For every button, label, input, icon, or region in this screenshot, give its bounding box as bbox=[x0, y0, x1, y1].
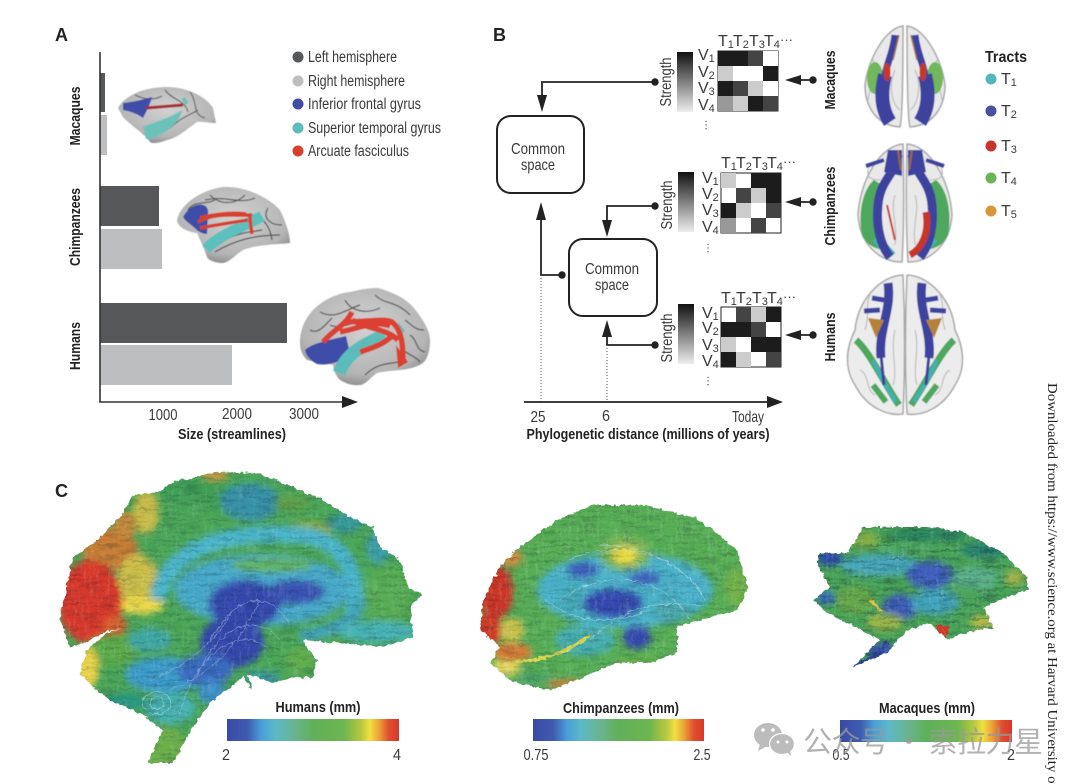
bar chart: streamlines by species: 1000 bbox=[148, 407, 178, 424]
matrix: humans: 4 bbox=[777, 296, 783, 308]
matrix: chimpanzees: Strength bbox=[659, 180, 676, 230]
matrix: macaques: 3 bbox=[709, 86, 715, 98]
matrix: humans: ··· bbox=[702, 376, 714, 386]
matrix: macaques: 2 bbox=[743, 39, 749, 51]
matrix: chimpanzees: V bbox=[702, 170, 713, 187]
bar chart: streamlines by species: Macaques bbox=[67, 86, 84, 146]
colorbar: macaques bbox=[832, 700, 1015, 764]
matrix: macaques: 4 bbox=[774, 39, 780, 51]
matrix: humans bbox=[659, 289, 796, 386]
colorbar: humans: Humans (mm) bbox=[276, 699, 361, 716]
tracts legend: T bbox=[1001, 103, 1011, 120]
matrix: macaques: V bbox=[698, 97, 709, 114]
tracts legend: 5 bbox=[1011, 209, 1017, 221]
matrix: humans: V bbox=[702, 337, 713, 354]
matrix: humans: T bbox=[736, 290, 746, 307]
colorbar: chimpanzees: 0.75 bbox=[524, 747, 549, 764]
matrix: chimpanzees: V bbox=[702, 219, 713, 236]
species labels beside top-view brains: Humans bbox=[822, 312, 839, 362]
bar chart: streamlines by species: 3000 bbox=[289, 406, 319, 423]
panel B: phylogenetic model bbox=[493, 25, 1027, 443]
matrix: chimpanzees: T bbox=[752, 155, 762, 172]
tracts legend: T bbox=[1001, 170, 1011, 187]
arrows from brains to matrices bbox=[785, 75, 817, 340]
matrix: chimpanzees bbox=[659, 154, 796, 254]
tracts legend: Tracts bbox=[985, 49, 1027, 66]
tracts legend: T bbox=[1001, 203, 1011, 220]
species labels beside top-view brains: Macaques bbox=[822, 50, 839, 110]
matrix: chimpanzees: 1 bbox=[731, 161, 737, 173]
panel B letter: B bbox=[493, 25, 506, 45]
matrix: humans: T bbox=[752, 290, 762, 307]
colorbar: humans: 4 bbox=[393, 747, 401, 764]
colorbar: humans: 2 bbox=[222, 747, 230, 764]
tracts legend: 3 bbox=[1011, 144, 1017, 156]
colorbar: chimpanzees bbox=[524, 700, 711, 764]
matrix: humans: 2 bbox=[746, 296, 752, 308]
legend: hemispheres and regions: Left hemisphere bbox=[308, 49, 397, 66]
matrix: macaques: T bbox=[749, 33, 759, 50]
legend: hemispheres and regions: Arcuate fasciculus bbox=[308, 143, 409, 160]
brain map: chimpanzees bbox=[480, 504, 748, 690]
watermark text: 公众号 · 索拉力星 bbox=[803, 719, 1043, 761]
bar chart: streamlines by species: Humans bbox=[67, 322, 84, 370]
matrix: chimpanzees: ··· bbox=[702, 242, 714, 254]
matrix: chimpanzees: V bbox=[702, 186, 713, 203]
matrix: macaques: 3 bbox=[759, 39, 765, 51]
matrix: humans: V bbox=[702, 305, 713, 322]
panel A: tract size bars bbox=[55, 25, 441, 443]
matrix: macaques: 2 bbox=[709, 70, 715, 82]
icon: WeChat bubbles bbox=[754, 723, 794, 756]
matrix: humans: 1 bbox=[731, 296, 737, 308]
timeline axis: Phylogenetic distance (millions of years) bbox=[526, 426, 770, 443]
species labels beside top-view brains: Chimpanzees bbox=[822, 166, 839, 246]
legend: hemispheres and regions: Superior temporal gyrus bbox=[308, 120, 441, 137]
colorbar: chimpanzees: 2.5 bbox=[694, 747, 711, 764]
matrix: humans: V bbox=[702, 353, 713, 370]
timeline axis: 25 bbox=[530, 409, 546, 426]
matrix: chimpanzees: 4 bbox=[777, 161, 783, 173]
matrix: chimpanzees: 2 bbox=[713, 192, 719, 204]
matrix: macaques: Strength bbox=[658, 58, 675, 106]
watermark: WeChat account bbox=[754, 719, 1043, 761]
common space box 2: Common bbox=[585, 261, 639, 278]
brain: macaque lateral bbox=[118, 87, 216, 143]
timeline axis bbox=[524, 396, 783, 443]
arrows between matrices and common spaces bbox=[536, 78, 659, 402]
tracts legend: 2 bbox=[1011, 109, 1017, 121]
matrix: macaques: T bbox=[733, 33, 743, 50]
matrix: chimpanzees: 2 bbox=[746, 161, 752, 173]
matrix: macaques: V bbox=[698, 80, 709, 97]
vertical download credit: Downloaded from https://www.science.org at Harvard University on bbox=[1044, 383, 1059, 784]
colorbar: chimpanzees: Chimpanzees (mm) bbox=[563, 700, 679, 717]
matrix: humans: V bbox=[702, 320, 713, 337]
matrix: macaques: T bbox=[764, 33, 774, 50]
timeline axis: Today bbox=[732, 409, 764, 426]
tracts legend bbox=[985, 49, 1027, 221]
panel C letter: C bbox=[55, 481, 68, 501]
matrix: chimpanzees: 4 bbox=[713, 225, 719, 237]
timeline axis: 6 bbox=[602, 408, 610, 425]
tracts legend: T bbox=[1001, 71, 1011, 88]
matrix: chimpanzees: 1 bbox=[713, 176, 719, 188]
tracts legend: T bbox=[1001, 138, 1011, 155]
panel C: cortical thickness maps bbox=[50, 465, 1035, 774]
matrix: humans: 2 bbox=[713, 326, 719, 338]
common space box 1 bbox=[497, 116, 584, 193]
legend: hemispheres and regions bbox=[292, 49, 441, 160]
matrix: macaques: T bbox=[718, 33, 728, 50]
bar chart: streamlines by species: 2000 bbox=[222, 406, 252, 423]
matrix: macaques: V bbox=[698, 64, 709, 81]
matrix: macaques: V bbox=[698, 47, 709, 64]
matrix: humans: 3 bbox=[762, 296, 768, 308]
colorbar: humans bbox=[222, 699, 401, 764]
legend: hemispheres and regions: Inferior frontal gyrus bbox=[308, 96, 421, 113]
colorbar: macaques: 2 bbox=[1007, 747, 1015, 764]
matrix: macaques: 4 bbox=[709, 103, 715, 115]
common space box 1: Common bbox=[511, 141, 565, 158]
matrix: chimpanzees: T bbox=[721, 155, 731, 172]
common space box 2: space bbox=[595, 277, 629, 294]
matrix: macaques: ··· bbox=[780, 32, 793, 47]
tracts legend: 4 bbox=[1011, 176, 1017, 188]
species labels beside top-view brains bbox=[822, 50, 839, 362]
matrix: chimpanzees: 3 bbox=[762, 161, 768, 173]
bar chart: streamlines by species bbox=[67, 52, 358, 443]
brain map: humans bbox=[50, 465, 430, 774]
brain top view: macaque tracts bbox=[865, 26, 945, 127]
matrix: humans: 4 bbox=[713, 359, 719, 371]
brain top view: chimpanzee tracts bbox=[858, 144, 952, 262]
tracts legend: 1 bbox=[1011, 77, 1017, 89]
legend: hemispheres and regions: Right hemisphere bbox=[308, 73, 405, 90]
matrix: humans: Strength bbox=[659, 314, 676, 362]
matrix: humans: ··· bbox=[783, 289, 796, 304]
colorbar: macaques: Macaques (mm) bbox=[879, 700, 975, 717]
panel A letter: A bbox=[55, 25, 68, 45]
matrix: humans: T bbox=[721, 290, 731, 307]
matrix: chimpanzees: 3 bbox=[713, 208, 719, 220]
brain: human lateral bbox=[300, 288, 430, 385]
matrix: humans: 1 bbox=[713, 311, 719, 323]
matrix: macaques: 1 bbox=[709, 53, 715, 65]
brain: chimpanzee lateral bbox=[177, 187, 290, 263]
matrix: chimpanzees: T bbox=[736, 155, 746, 172]
matrix: macaques: 1 bbox=[728, 39, 734, 51]
bar chart: streamlines by species: Size (streamlines) bbox=[178, 426, 286, 443]
matrix: humans: T bbox=[767, 290, 777, 307]
bar chart: streamlines by species: Chimpanzees bbox=[67, 188, 84, 266]
colorbar: macaques: 0.5 bbox=[832, 747, 850, 764]
matrix: macaques: ··· bbox=[700, 120, 712, 130]
common space box 2 bbox=[569, 239, 657, 316]
brain top view: human tracts bbox=[848, 275, 962, 414]
matrix: chimpanzees: T bbox=[767, 155, 777, 172]
matrix: humans: 3 bbox=[713, 343, 719, 355]
common space box 1: space bbox=[521, 157, 555, 174]
matrix: chimpanzees: V bbox=[702, 202, 713, 219]
brain map: macaques bbox=[813, 526, 1029, 668]
matrix: chimpanzees: ··· bbox=[783, 154, 796, 169]
matrix: macaques bbox=[658, 32, 793, 130]
